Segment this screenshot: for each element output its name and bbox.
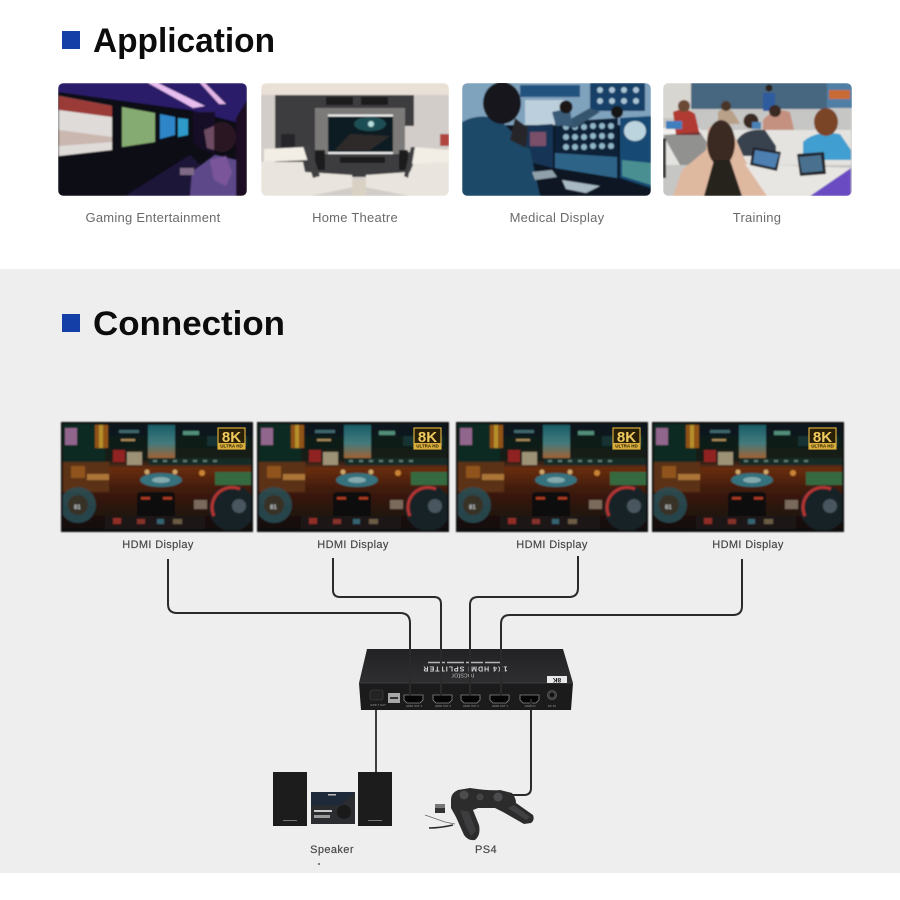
plug: HDMI in (530, 699, 532, 705)
splitter device: HDMI OUT 4 (406, 704, 422, 708)
splitter device: S/PD T OUT (370, 703, 386, 707)
HDMI display 3: ULTRA HD (615, 444, 638, 448)
panel: training photo (663, 83, 852, 196)
cable: output 2 to display 3 (470, 556, 578, 696)
caption: Training: Training (733, 210, 781, 225)
connection section background (0, 269, 900, 873)
cable: output 1 to display 4 (501, 559, 742, 696)
splitter device: DC 5V (548, 704, 556, 708)
cable: HDMI in to PS4 (512, 705, 531, 795)
caption: Medical Display: Medical Display (510, 210, 605, 225)
icon: game controller (425, 788, 534, 840)
HDMI display 2: ULTRA HD (416, 444, 439, 448)
panel: medical display photo (462, 82, 651, 196)
splitter device: HDMI OUT 1 (492, 704, 508, 708)
panel: home theatre photo (261, 83, 449, 196)
HDMI display 4 (651, 422, 846, 532)
caption: Home Theatre: Home Theatre (312, 210, 398, 225)
HDMI display 4: 8K (813, 429, 832, 446)
small dot under speaker (318, 863, 320, 865)
splitter device (359, 649, 573, 710)
display labels: HDMI Display (317, 539, 389, 551)
caption: Speaker: Speaker (310, 844, 354, 856)
cable: output 4 to display 1 (168, 559, 410, 696)
display labels: HDMI Display (122, 539, 194, 551)
HDMI display 3: 8K (617, 429, 636, 446)
caption: PS4: PS4 (475, 844, 497, 856)
heading: Connection: Connection (93, 305, 285, 343)
splitter device: rocstor (451, 672, 474, 681)
HDMI display 1 (60, 422, 255, 532)
splitter device: HDMI IN (525, 704, 535, 708)
caption: Gaming Entertainment: Gaming Entertainment (85, 210, 221, 225)
splitter device: HDMI OUT 3 (435, 704, 451, 708)
display labels (122, 539, 784, 551)
splitter device: HDMI OUT 2 (463, 704, 479, 708)
HDMI display 2 (256, 422, 451, 532)
heading: Application: Application (93, 22, 275, 60)
HDMI display 1: 8K (222, 429, 241, 446)
splitter device: 1X4 HDMI SPLITTER (422, 665, 508, 672)
icon: speaker system (273, 772, 392, 826)
HDMI display 1: ULTRA HD (220, 444, 243, 448)
display labels: HDMI Display (712, 539, 784, 551)
HDMI display 3 (455, 422, 650, 532)
cable: audio out to speaker (375, 705, 377, 773)
panel: gaming entertainment photo (58, 83, 247, 196)
HDMI display 4: ULTRA HD (811, 444, 834, 448)
HDMI display 2: 8K (418, 429, 437, 446)
cable: output 3 to display 2 (333, 558, 441, 696)
display labels: HDMI Display (516, 539, 588, 551)
splitter device: 8K (553, 676, 561, 683)
